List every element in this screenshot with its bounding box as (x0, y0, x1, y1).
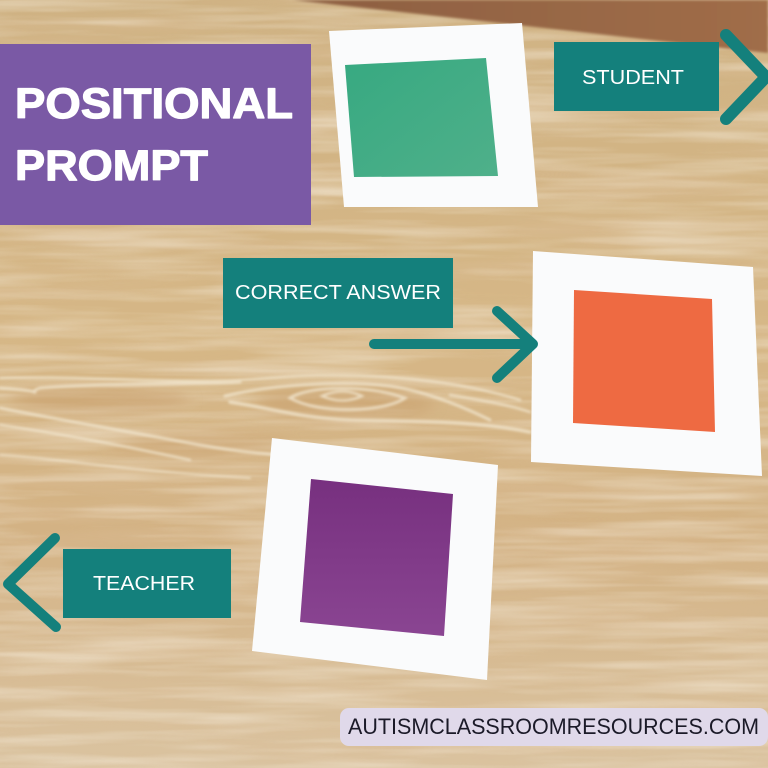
card: purple square (252, 438, 498, 680)
arrow: student (726, 35, 766, 119)
website badge (340, 708, 768, 746)
label: correct answer (223, 258, 453, 328)
title panel: POSITIONAL (15, 80, 293, 128)
label: correct answer: CORRECT ANSWER (235, 282, 441, 304)
label: student (554, 42, 719, 111)
title panel (0, 44, 311, 225)
arrow: teacher (8, 538, 56, 627)
label: student: STUDENT (582, 67, 684, 89)
label: teacher: TEACHER (93, 573, 195, 595)
card: green square (329, 23, 538, 207)
card: orange square (531, 251, 762, 476)
website badge: AUTISMCLASSROOMRESOURCES.COM (348, 714, 759, 739)
label: teacher (63, 549, 231, 618)
title panel: PROMPT (15, 142, 208, 190)
arrow: correct answer (374, 311, 533, 378)
